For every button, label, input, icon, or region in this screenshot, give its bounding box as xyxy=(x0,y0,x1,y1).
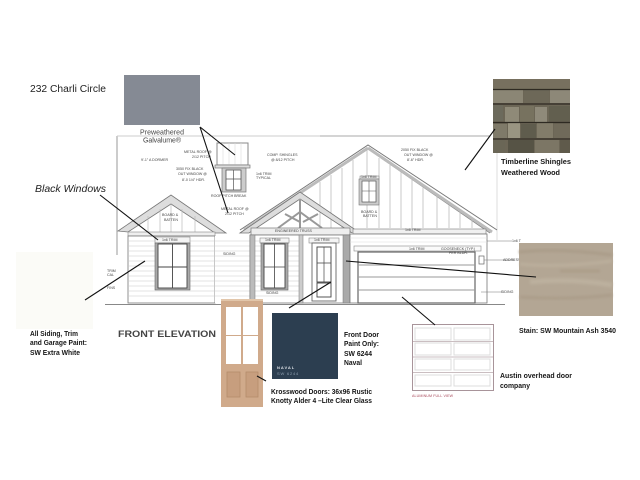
label: garage door company: company xyxy=(500,383,530,390)
drawing annotations: 8'-6" HDR. xyxy=(407,158,424,162)
swatch: naval paint: SW 6244 xyxy=(277,371,299,376)
title: 232 Charli Circle xyxy=(30,84,106,95)
drawing annotations: 2050 FIX BLACK xyxy=(401,148,429,152)
drawing annotations: 1x6 TRIM xyxy=(256,172,272,176)
swatch: naval paint xyxy=(272,313,338,379)
left gable xyxy=(118,195,226,303)
drawing annotations: Preweathered xyxy=(140,130,184,136)
drawing annotations: 8'-0 1/4" HDR. xyxy=(182,178,205,182)
label: shingles: Weathered Wood xyxy=(501,170,560,177)
drawing annotations xyxy=(107,130,522,295)
drawing annotations: TYPICAL xyxy=(256,176,271,180)
drawing annotations: OUT WINDOW @ xyxy=(178,172,207,176)
drawing annotations: 2/12 PITCH xyxy=(192,155,211,159)
label: front door paint: Naval xyxy=(344,360,362,367)
label: krosswood doors xyxy=(271,389,372,405)
drawing annotations: BATTEN xyxy=(363,214,377,218)
label: garage door company xyxy=(500,373,572,390)
drawing annotations: CAL xyxy=(107,273,114,277)
drawing annotations: PER BLDR. xyxy=(449,251,468,255)
garage xyxy=(350,229,515,303)
label: garage door company: Austin overhead door xyxy=(500,373,572,380)
drawing annotations: SIDING xyxy=(223,252,236,256)
drawing annotations: COMP. SHINGLES xyxy=(267,153,298,157)
dormer xyxy=(215,143,250,192)
label: black windows: Black Windows xyxy=(35,183,107,195)
label: front door paint xyxy=(344,332,379,367)
drawing annotations: 3050 FIX BLACK xyxy=(176,167,204,171)
centre porch xyxy=(215,192,360,303)
drawing annotations: BATTEN xyxy=(164,218,178,222)
label: shingles: Timberline Shingles xyxy=(501,159,571,166)
garage door swatch xyxy=(412,324,494,398)
drawing annotations: BOARD & xyxy=(361,210,378,214)
drawing annotations: SIDING xyxy=(266,291,279,295)
swatch: naval paint: NAVAL xyxy=(277,365,295,370)
drawing annotations: GOOSENECK (TYP.) xyxy=(441,247,475,251)
label: stain: Stain: SW Mountain Ash 3540 xyxy=(519,328,616,335)
drawing annotations: 1x6 TRIM xyxy=(162,238,178,242)
label: front door paint: Front Door xyxy=(344,332,379,339)
drawing annotations: SIDING xyxy=(501,290,514,294)
label: siding paint: All Siding, Trim xyxy=(30,331,78,338)
door photo xyxy=(221,299,263,407)
label: front door paint: Paint Only: xyxy=(344,341,379,348)
drawing annotations: METAL ROOF @ xyxy=(184,150,212,154)
swatch: shingles xyxy=(493,79,570,153)
drawing annotations: ENGINEERED TRUSS xyxy=(275,229,312,233)
front elevation drawing xyxy=(105,130,522,340)
swatch: extra white xyxy=(16,252,93,329)
drawing annotations: 1x6 T xyxy=(512,239,522,243)
label: siding paint: and Garage Paint: xyxy=(30,340,87,347)
drawing annotations: Galvalume® xyxy=(143,136,182,144)
drawing annotations: 1x6 TRIM xyxy=(409,247,425,251)
drawing annotations: 1x6 TRIM xyxy=(265,238,281,242)
label: siding paint: SW Extra White xyxy=(30,350,80,357)
drawing annotations: TRIM xyxy=(107,269,116,273)
swatch: stain xyxy=(519,243,613,316)
label: front door paint: SW 6244 xyxy=(344,351,372,358)
drawing annotations: @ 8/12 PITCH xyxy=(271,158,295,162)
callout lines xyxy=(85,127,536,381)
swatch: galvalume xyxy=(124,75,200,125)
drawing annotations: 1x6 TRIM xyxy=(405,228,421,232)
drawing annotations: ADDRESS xyxy=(503,258,521,262)
drawing annotations: 9'-1" A DORMER xyxy=(141,158,169,162)
label: krosswood doors: Krosswood Doors: 36x96 Rustic xyxy=(271,389,372,396)
drawing annotations: 1x6 TRIM xyxy=(314,238,330,242)
label: shingles xyxy=(501,159,571,177)
drawing annotations: ROOF PITCH BREAK xyxy=(211,194,247,198)
drawing annotations: 2/12 PITCH xyxy=(225,212,244,216)
heading: front elevation: FRONT ELEVATION xyxy=(118,329,216,340)
big roof background xyxy=(240,145,497,233)
drawing annotations: BOARD & xyxy=(162,213,179,217)
label: krosswood doors: Knotty Alder 4 –Lite Clear Glass xyxy=(271,398,372,405)
label: siding paint xyxy=(30,331,87,357)
ground line xyxy=(105,304,505,306)
garage door swatch: ALUMINUM FULL VIEW xyxy=(412,394,454,398)
drawing annotations: 1x6 TRIM xyxy=(361,175,377,179)
drawing annotations: FINS xyxy=(107,286,116,290)
drawing annotations: METAL ROOF @ xyxy=(221,207,249,211)
drawing annotations: OUT WINDOW @ xyxy=(404,153,433,157)
